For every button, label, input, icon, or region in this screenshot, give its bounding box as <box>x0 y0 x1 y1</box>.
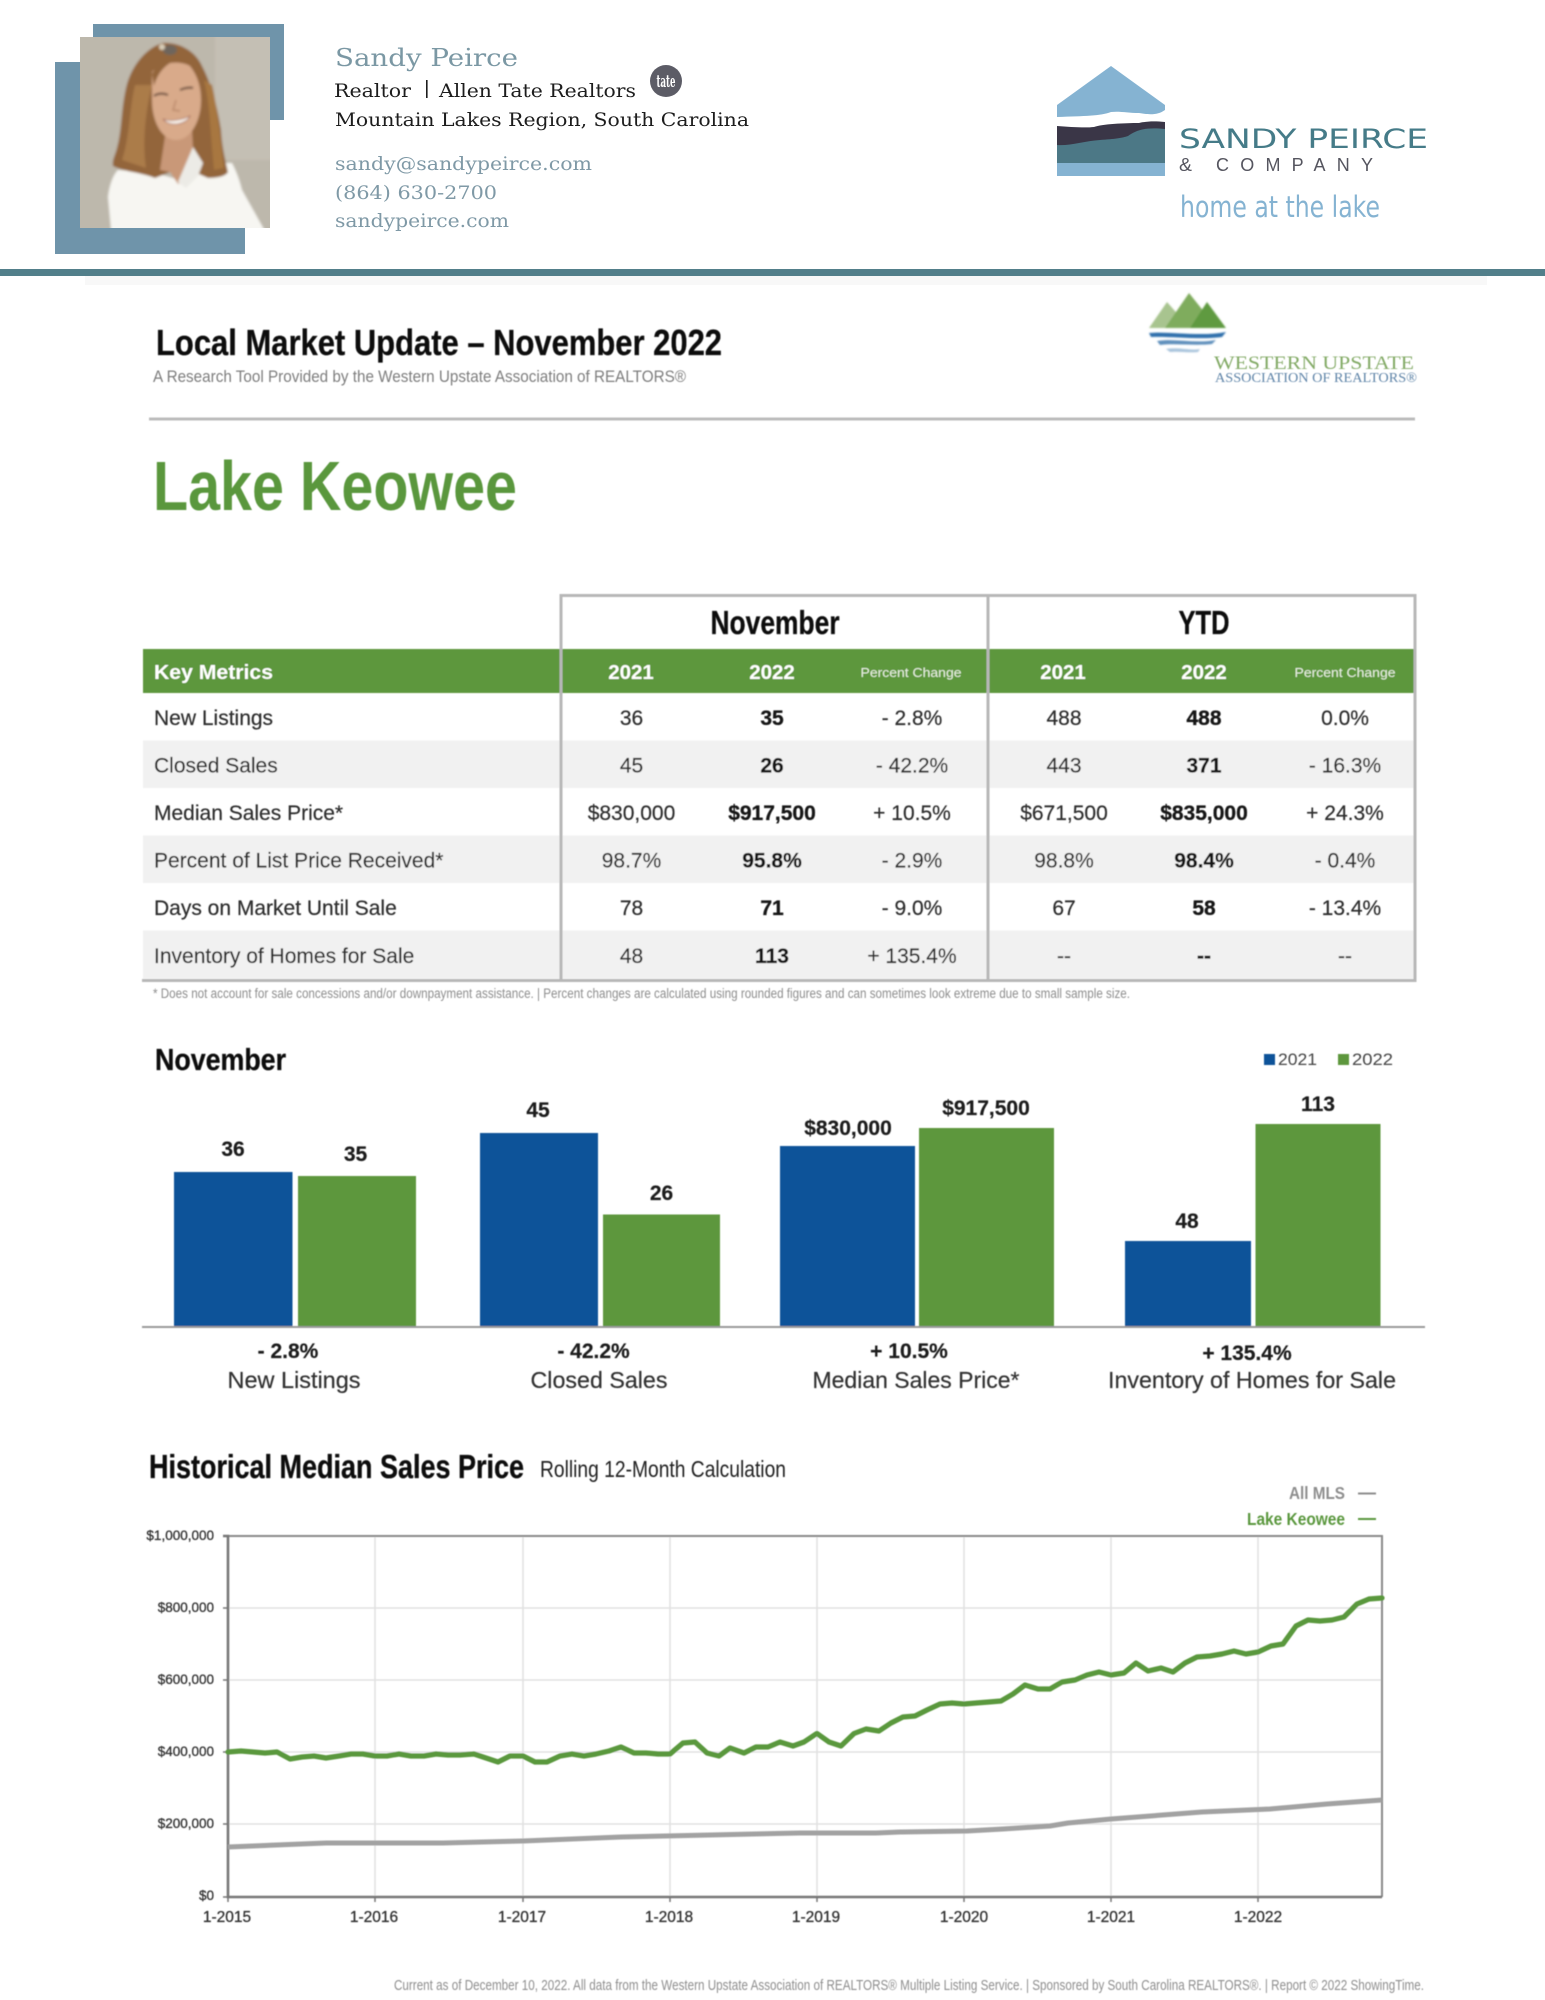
row: Percent of List Price Received <box>154 850 1375 872</box>
icon: Allen Tate badge: tate <box>656 72 676 92</box>
category label: New Listings: - 2.8% <box>258 1340 319 1363</box>
divider <box>149 418 1415 420</box>
row: New Listings: 488 <box>1186 707 1222 730</box>
row: Percent of List Price Received: - 2.9% <box>882 850 942 872</box>
category label: Closed Sales: Closed Sales <box>530 1367 668 1393</box>
row: Closed Sales: - 42.2% <box>876 754 948 778</box>
line chart legend <box>1247 1483 1376 1529</box>
line chart legend: Lake Keowee <box>1247 1509 1345 1529</box>
category label: Closed Sales: - 42.2% <box>557 1340 630 1363</box>
row: Days on Market Until Sale <box>154 897 1381 920</box>
row: Median Sales Price: $835,000 <box>1160 802 1248 825</box>
portrait photo of Sandy Peirce <box>80 37 270 228</box>
x-axis labels: 1-2016 <box>350 1909 398 1926</box>
category label: Closed Sales <box>530 1340 668 1393</box>
row: Days on Market Until Sale: 78 <box>620 897 643 920</box>
line: All MLS <box>228 1800 1382 1847</box>
row: New Listings: 35 <box>760 707 784 730</box>
x-axis labels: 1-2018 <box>645 1909 693 1926</box>
row: Percent of List Price Received: 95.8% <box>742 850 802 872</box>
column heading: YTD: YTD <box>1178 604 1230 641</box>
row: Closed Sales: 26 <box>760 754 784 778</box>
icon: house with lake and mountains <box>1057 66 1165 176</box>
row: Inventory of Homes for Sale: + 135.4% <box>867 945 957 968</box>
header labels: Key Metrics <box>154 661 273 684</box>
bars: Closed Sales: 45 <box>526 1099 550 1122</box>
y-axis labels: $200,000 <box>158 1816 214 1831</box>
header labels <box>154 661 1396 684</box>
y-axis labels: $1,000,000 <box>146 1528 214 1543</box>
row: Median Sales Price: $830,000 <box>588 802 675 825</box>
bars: Median Sales Price: $830,000 <box>804 1117 892 1140</box>
row: Percent of List Price Received: 98.4% <box>1174 850 1234 872</box>
bars: New Listings: 36 <box>221 1138 245 1161</box>
y-axis labels <box>146 1528 214 1903</box>
area heading: Lake Keowee: Lake Keowee <box>153 447 517 525</box>
line: Lake Keowee <box>228 1598 1382 1762</box>
role and brokerage: Allen Tate Realtors <box>438 80 636 102</box>
association subline: ASSOCIATION OF REALTORS® <box>1215 371 1417 386</box>
bars: Closed Sales: 26 <box>650 1182 673 1205</box>
chart grid <box>228 1536 1382 1897</box>
bars: Inventory of Homes for Sale <box>1125 1093 1380 1326</box>
row: New Listings: - 2.8% <box>882 707 942 730</box>
logo wordmark: SANDY PEIRCE <box>1179 124 1428 155</box>
x-axis labels: 1-2020 <box>940 1909 989 1926</box>
row: Days on Market Until Sale: Days on Market Until Sale <box>154 897 397 920</box>
row: Days on Market Until Sale: 67 <box>1052 897 1076 920</box>
row: Percent of List Price Received: - 0.4% <box>1315 850 1375 872</box>
y-axis labels: $800,000 <box>158 1600 214 1615</box>
category label: Inventory of Homes for Sale: + 135.4% <box>1202 1342 1292 1365</box>
row: Inventory of Homes for Sale: 113 <box>755 945 789 968</box>
title: Local Market Update – November 2022 <box>156 322 722 363</box>
x-axis labels: 1-2022 <box>1234 1909 1282 1926</box>
row: Inventory of Homes for Sale: -- <box>1338 945 1352 968</box>
header labels: 2022 <box>749 661 795 684</box>
row: Median Sales Price: $671,500 <box>1020 802 1108 825</box>
row: Closed Sales: 45 <box>620 754 643 778</box>
category label: Median Sales Price: + 10.5% <box>870 1340 948 1363</box>
line chart legend: All MLS <box>1289 1483 1345 1503</box>
icon: Allen Tate badge <box>650 65 682 97</box>
logo: Western Upstate Association of Realtors <box>1149 293 1417 386</box>
row: Percent of List Price Received: Percent of List Price Received* <box>154 850 443 872</box>
row: Median Sales Price: + 10.5% <box>873 802 951 825</box>
panel: key metrics table <box>142 596 1416 980</box>
row: New Listings: 36 <box>620 707 643 730</box>
header divider bar <box>0 269 1545 276</box>
bars: New Listings <box>174 1138 416 1326</box>
row: Days on Market Until Sale: - 9.0% <box>882 897 942 920</box>
row: Closed Sales: Closed Sales <box>154 754 278 778</box>
bar chart baseline <box>142 1326 1425 1328</box>
category label: Inventory of Homes for Sale <box>1108 1342 1396 1393</box>
column heading: November: November <box>710 604 840 641</box>
row: Closed Sales: - 16.3% <box>1309 754 1381 778</box>
chart heading: Historical Median Sales Price <box>149 1448 524 1485</box>
phone: (864) 630-2700 <box>335 182 497 204</box>
row: New Listings <box>154 707 1369 730</box>
row: Inventory of Homes for Sale: 48 <box>620 945 643 968</box>
x-axis labels: 1-2017 <box>498 1909 546 1926</box>
row: Median Sales Price <box>154 802 1384 825</box>
bars: New Listings: 35 <box>344 1143 367 1166</box>
row: Median Sales Price: $917,500 <box>728 802 816 825</box>
chart legend: 2021 <box>1278 1050 1317 1069</box>
table borders <box>142 596 1416 980</box>
row: Days on Market Until Sale: - 13.4% <box>1309 897 1381 920</box>
role and brokerage <box>334 80 636 102</box>
x-axis labels <box>203 1909 1282 1926</box>
row: Days on Market Until Sale: 58 <box>1192 897 1216 920</box>
header labels: 2022 <box>1181 661 1227 684</box>
category label: New Listings: New Listings <box>228 1367 360 1393</box>
region: Mountain Lakes Region, South Carolina <box>335 109 749 131</box>
x-axis labels: 1-2019 <box>792 1909 840 1926</box>
table row backgrounds <box>143 740 1414 978</box>
chart legend: 2022 <box>1352 1050 1393 1069</box>
chart frame and axes <box>223 1536 1382 1902</box>
table header band <box>143 649 1414 693</box>
row: Inventory of Homes for Sale <box>154 945 1352 968</box>
y-axis labels: $600,000 <box>158 1672 214 1687</box>
header labels: Percent Change <box>860 665 962 680</box>
email: sandy@sandypeirce.com <box>335 153 592 175</box>
logo subline ampersand: & <box>1179 155 1192 175</box>
bars: Median Sales Price <box>780 1097 1054 1326</box>
row: Days on Market Until Sale: 71 <box>760 897 784 920</box>
chart subheading: Rolling 12-Month Calculation <box>540 1456 786 1482</box>
x-axis labels: 1-2021 <box>1087 1909 1135 1926</box>
header: agent contact block <box>55 20 749 254</box>
logo subline: COMPANY <box>1216 155 1373 175</box>
report title block <box>153 322 722 386</box>
row: New Listings: 488 <box>1046 707 1082 730</box>
row: Median Sales Price: + 24.3% <box>1306 802 1384 825</box>
x-axis labels: 1-2015 <box>203 1909 251 1926</box>
bars: Inventory of Homes for Sale: 113 <box>1301 1093 1335 1116</box>
bars: Inventory of Homes for Sale: 48 <box>1175 1210 1199 1233</box>
panel: historical median sales price line chart <box>146 1448 1382 1926</box>
header labels: Percent Change <box>1294 665 1396 680</box>
category label: New Listings <box>228 1340 360 1393</box>
chart legend <box>1264 1050 1393 1069</box>
row: Inventory of Homes for Sale: -- <box>1057 945 1071 968</box>
y-axis labels: $400,000 <box>158 1744 214 1759</box>
subtitle: A Research Tool Provided by the Western Upstate Association of REALTORS® <box>153 367 686 386</box>
header labels: 2021 <box>608 661 654 684</box>
row: Inventory of Homes for Sale: -- <box>1197 945 1211 968</box>
row: Median Sales Price: Median Sales Price* <box>154 802 343 825</box>
panel: November bar chart <box>142 1042 1425 1393</box>
table footnote: * Does not account for sale concessions and/or downpayment assistance. | Percent changes are calculated using rounded figures and can sometimes look extreme due to small sample size. <box>153 986 1130 1001</box>
row: New Listings: New Listings <box>154 707 273 730</box>
bars: Closed Sales <box>480 1099 720 1326</box>
row: Closed Sales: 371 <box>1186 754 1222 778</box>
bars: Median Sales Price: $917,500 <box>942 1097 1030 1120</box>
row: Closed Sales <box>154 754 1381 778</box>
icon: green mountains over water <box>1149 293 1226 352</box>
photo frame: blue offset rectangles <box>55 24 284 254</box>
row: Inventory of Homes for Sale: Inventory of Homes for Sale <box>154 945 414 968</box>
category label: Inventory of Homes for Sale: Inventory of Homes for Sale <box>1108 1367 1396 1393</box>
company logo: Sandy Peirce & Company <box>1057 66 1428 224</box>
logo tagline: home at the lake <box>1180 190 1380 224</box>
role and brokerage: Realtor <box>334 80 412 102</box>
chart heading: November <box>155 1042 286 1077</box>
row: Percent of List Price Received: 98.8% <box>1034 850 1094 872</box>
header labels: 2021 <box>1040 661 1086 684</box>
row: Closed Sales: 443 <box>1046 754 1082 778</box>
y-axis labels: $0 <box>199 1888 214 1903</box>
name: Sandy Peirce <box>335 44 518 72</box>
category label: Median Sales Price: Median Sales Price* <box>812 1367 1020 1393</box>
website: sandypeirce.com <box>335 210 509 232</box>
row: New Listings: 0.0% <box>1321 707 1369 730</box>
row: Percent of List Price Received: 98.7% <box>602 850 661 872</box>
association name: WESTERN UPSTATE <box>1214 353 1414 374</box>
category label: Median Sales Price <box>812 1340 1020 1393</box>
